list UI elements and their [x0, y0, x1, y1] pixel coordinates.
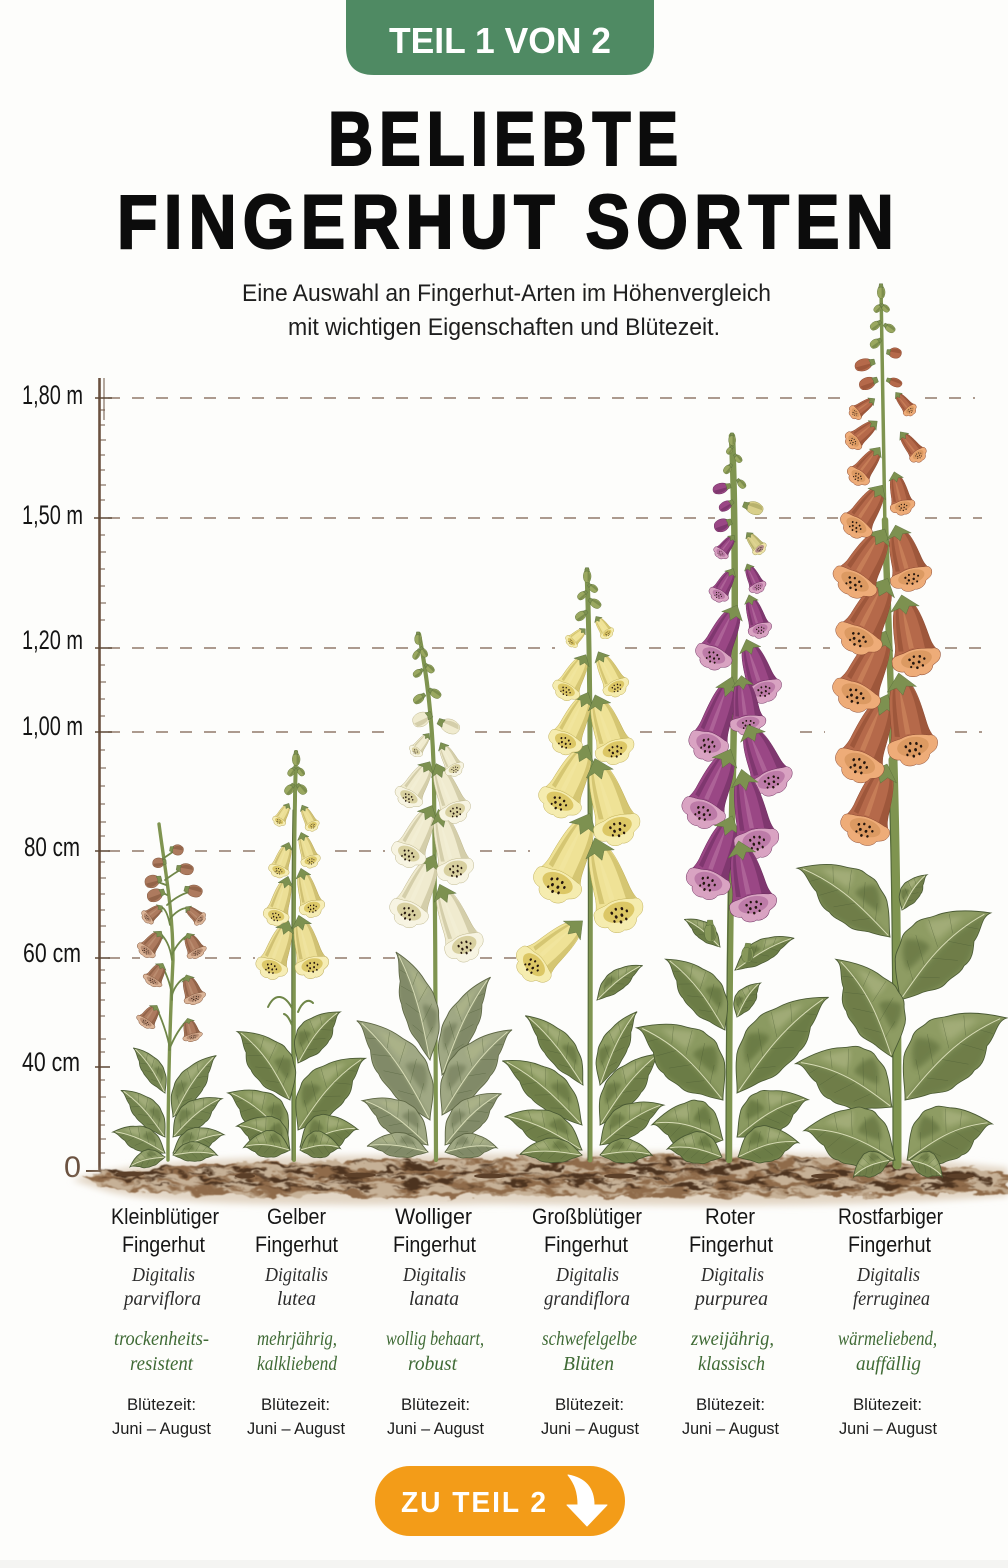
plant 1: Kleinblütiger Fingerhut [110, 824, 226, 1170]
axis labels: 80 cm [24, 832, 80, 862]
title [117, 97, 900, 265]
label: Rostfarbiger Fingerhut: Juni – August [839, 1419, 937, 1438]
badge: Teil 1 von 2 [346, 0, 654, 75]
height grid lines [108, 398, 982, 958]
label: Kleinblütiger Fingerhut: resistent [130, 1353, 193, 1375]
label: Gelber Fingerhut: Gelber [267, 1204, 326, 1229]
label: Gelber Fingerhut: Fingerhut [255, 1232, 338, 1257]
label: Gelber Fingerhut [247, 1204, 345, 1438]
axis labels: 1,00 m [22, 711, 83, 741]
plant 3: Wolliger Fingerhut [348, 632, 520, 1162]
badge: Teil 1 von 2: TEIL 1 VON 2 [389, 20, 611, 61]
label: Roter Fingerhut: Roter [705, 1204, 755, 1229]
label: Roter Fingerhut: klassisch [698, 1353, 765, 1375]
label: Rostfarbiger Fingerhut: Blütezeit: [853, 1395, 922, 1414]
soil strip [72, 1152, 1008, 1206]
label: Gelber Fingerhut: mehrjährig, [257, 1328, 337, 1350]
label: Großblütiger Fingerhut: Großblütiger [532, 1204, 642, 1229]
height axis [86, 378, 112, 1172]
button: Zu Teil 2: ZU TEIL 2 [401, 1487, 548, 1519]
label: Kleinblütiger Fingerhut: trockenheits- [114, 1328, 209, 1350]
icon: curved arrow [567, 1475, 607, 1526]
axis labels: 40 cm [22, 1047, 80, 1077]
label: Rostfarbiger Fingerhut [838, 1204, 943, 1438]
label: Rostfarbiger Fingerhut: ferruginea [853, 1288, 930, 1310]
axis labels: 60 cm [23, 938, 81, 968]
label: Gelber Fingerhut: lutea [277, 1288, 316, 1310]
label: Gelber Fingerhut: kalkliebend [257, 1353, 338, 1375]
label: Gelber Fingerhut: Digitalis [264, 1264, 328, 1286]
label: Wolliger Fingerhut: wollig behaart, [386, 1328, 484, 1350]
label: Großblütiger Fingerhut: Fingerhut [544, 1232, 628, 1257]
label: Wolliger Fingerhut: Fingerhut [393, 1232, 476, 1257]
label: Rostfarbiger Fingerhut: Fingerhut [848, 1232, 931, 1257]
label: Roter Fingerhut: Fingerhut [689, 1232, 773, 1257]
label: Großblütiger Fingerhut: schwefelgelbe [542, 1328, 637, 1350]
label: Großblütiger Fingerhut: Blütezeit: [555, 1395, 624, 1414]
subtitle [242, 280, 771, 341]
label: Kleinblütiger Fingerhut: parviflora [122, 1288, 201, 1310]
label: Wolliger Fingerhut: robust [408, 1353, 457, 1375]
label: Großblütiger Fingerhut: Blüten [563, 1353, 614, 1375]
label: Kleinblütiger Fingerhut: Blütezeit: [127, 1395, 196, 1414]
plant 6: Rostfarbiger Fingerhut [789, 284, 1008, 1183]
button: Zu Teil 2 [375, 1466, 625, 1536]
title: FINGERHUT SORTEN [117, 180, 900, 265]
label: Roter Fingerhut: Blütezeit: [696, 1395, 765, 1414]
label: Rostfarbiger Fingerhut: Digitalis [856, 1264, 920, 1286]
label: Roter Fingerhut: purpurea [693, 1288, 768, 1310]
plant 2: Gelber Fingerhut [222, 751, 373, 1162]
plant 4: Großblütiger Fingerhut [497, 568, 668, 1165]
axis labels: 1,50 m [22, 500, 83, 530]
label: Wolliger Fingerhut: Juni – August [387, 1419, 484, 1438]
label: Rostfarbiger Fingerhut: Rostfarbiger [838, 1204, 943, 1229]
label: Kleinblütiger Fingerhut: Kleinblütiger [111, 1204, 219, 1229]
label: Wolliger Fingerhut [386, 1204, 484, 1438]
label: Roter Fingerhut: Juni – August [682, 1419, 779, 1438]
label: Wolliger Fingerhut: Wolliger [395, 1204, 472, 1229]
label: Rostfarbiger Fingerhut: wärmeliebend, [838, 1328, 937, 1350]
title: BELIEBTE [328, 97, 684, 182]
label: Großblütiger Fingerhut: Digitalis [555, 1264, 619, 1286]
label: Kleinblütiger Fingerhut: Digitalis [131, 1264, 195, 1286]
label: Kleinblütiger Fingerhut [111, 1204, 219, 1438]
label: Roter Fingerhut: zweijährig, [690, 1328, 774, 1350]
label: Rostfarbiger Fingerhut: auffällig [856, 1353, 921, 1375]
plant 5: Roter Fingerhut [627, 433, 838, 1172]
label: Gelber Fingerhut: Blütezeit: [261, 1395, 330, 1414]
label: Kleinblütiger Fingerhut: Juni – August [112, 1419, 211, 1438]
subtitle: Eine Auswahl an Fingerhut-Arten im Höhenvergleich [242, 280, 771, 307]
label: Großblütiger Fingerhut: Juni – August [541, 1419, 639, 1438]
label: Kleinblütiger Fingerhut: Fingerhut [122, 1232, 205, 1257]
label: Großblütiger Fingerhut [532, 1204, 642, 1438]
subtitle: mit wichtigen Eigenschaften und Blütezeit. [288, 314, 720, 341]
label: Wolliger Fingerhut: lanata [409, 1288, 459, 1310]
axis labels: 0 [64, 1151, 81, 1184]
axis labels [22, 380, 83, 1184]
label: Roter Fingerhut: Digitalis [700, 1264, 764, 1286]
label: Gelber Fingerhut: Juni – August [247, 1419, 345, 1438]
label: Wolliger Fingerhut: Blütezeit: [401, 1395, 470, 1414]
axis labels: 1,20 m [22, 625, 83, 655]
label: Großblütiger Fingerhut: grandiflora [544, 1288, 630, 1310]
label: Roter Fingerhut [682, 1204, 779, 1438]
axis labels: 1,80 m [22, 380, 83, 410]
label: Wolliger Fingerhut: Digitalis [402, 1264, 466, 1286]
